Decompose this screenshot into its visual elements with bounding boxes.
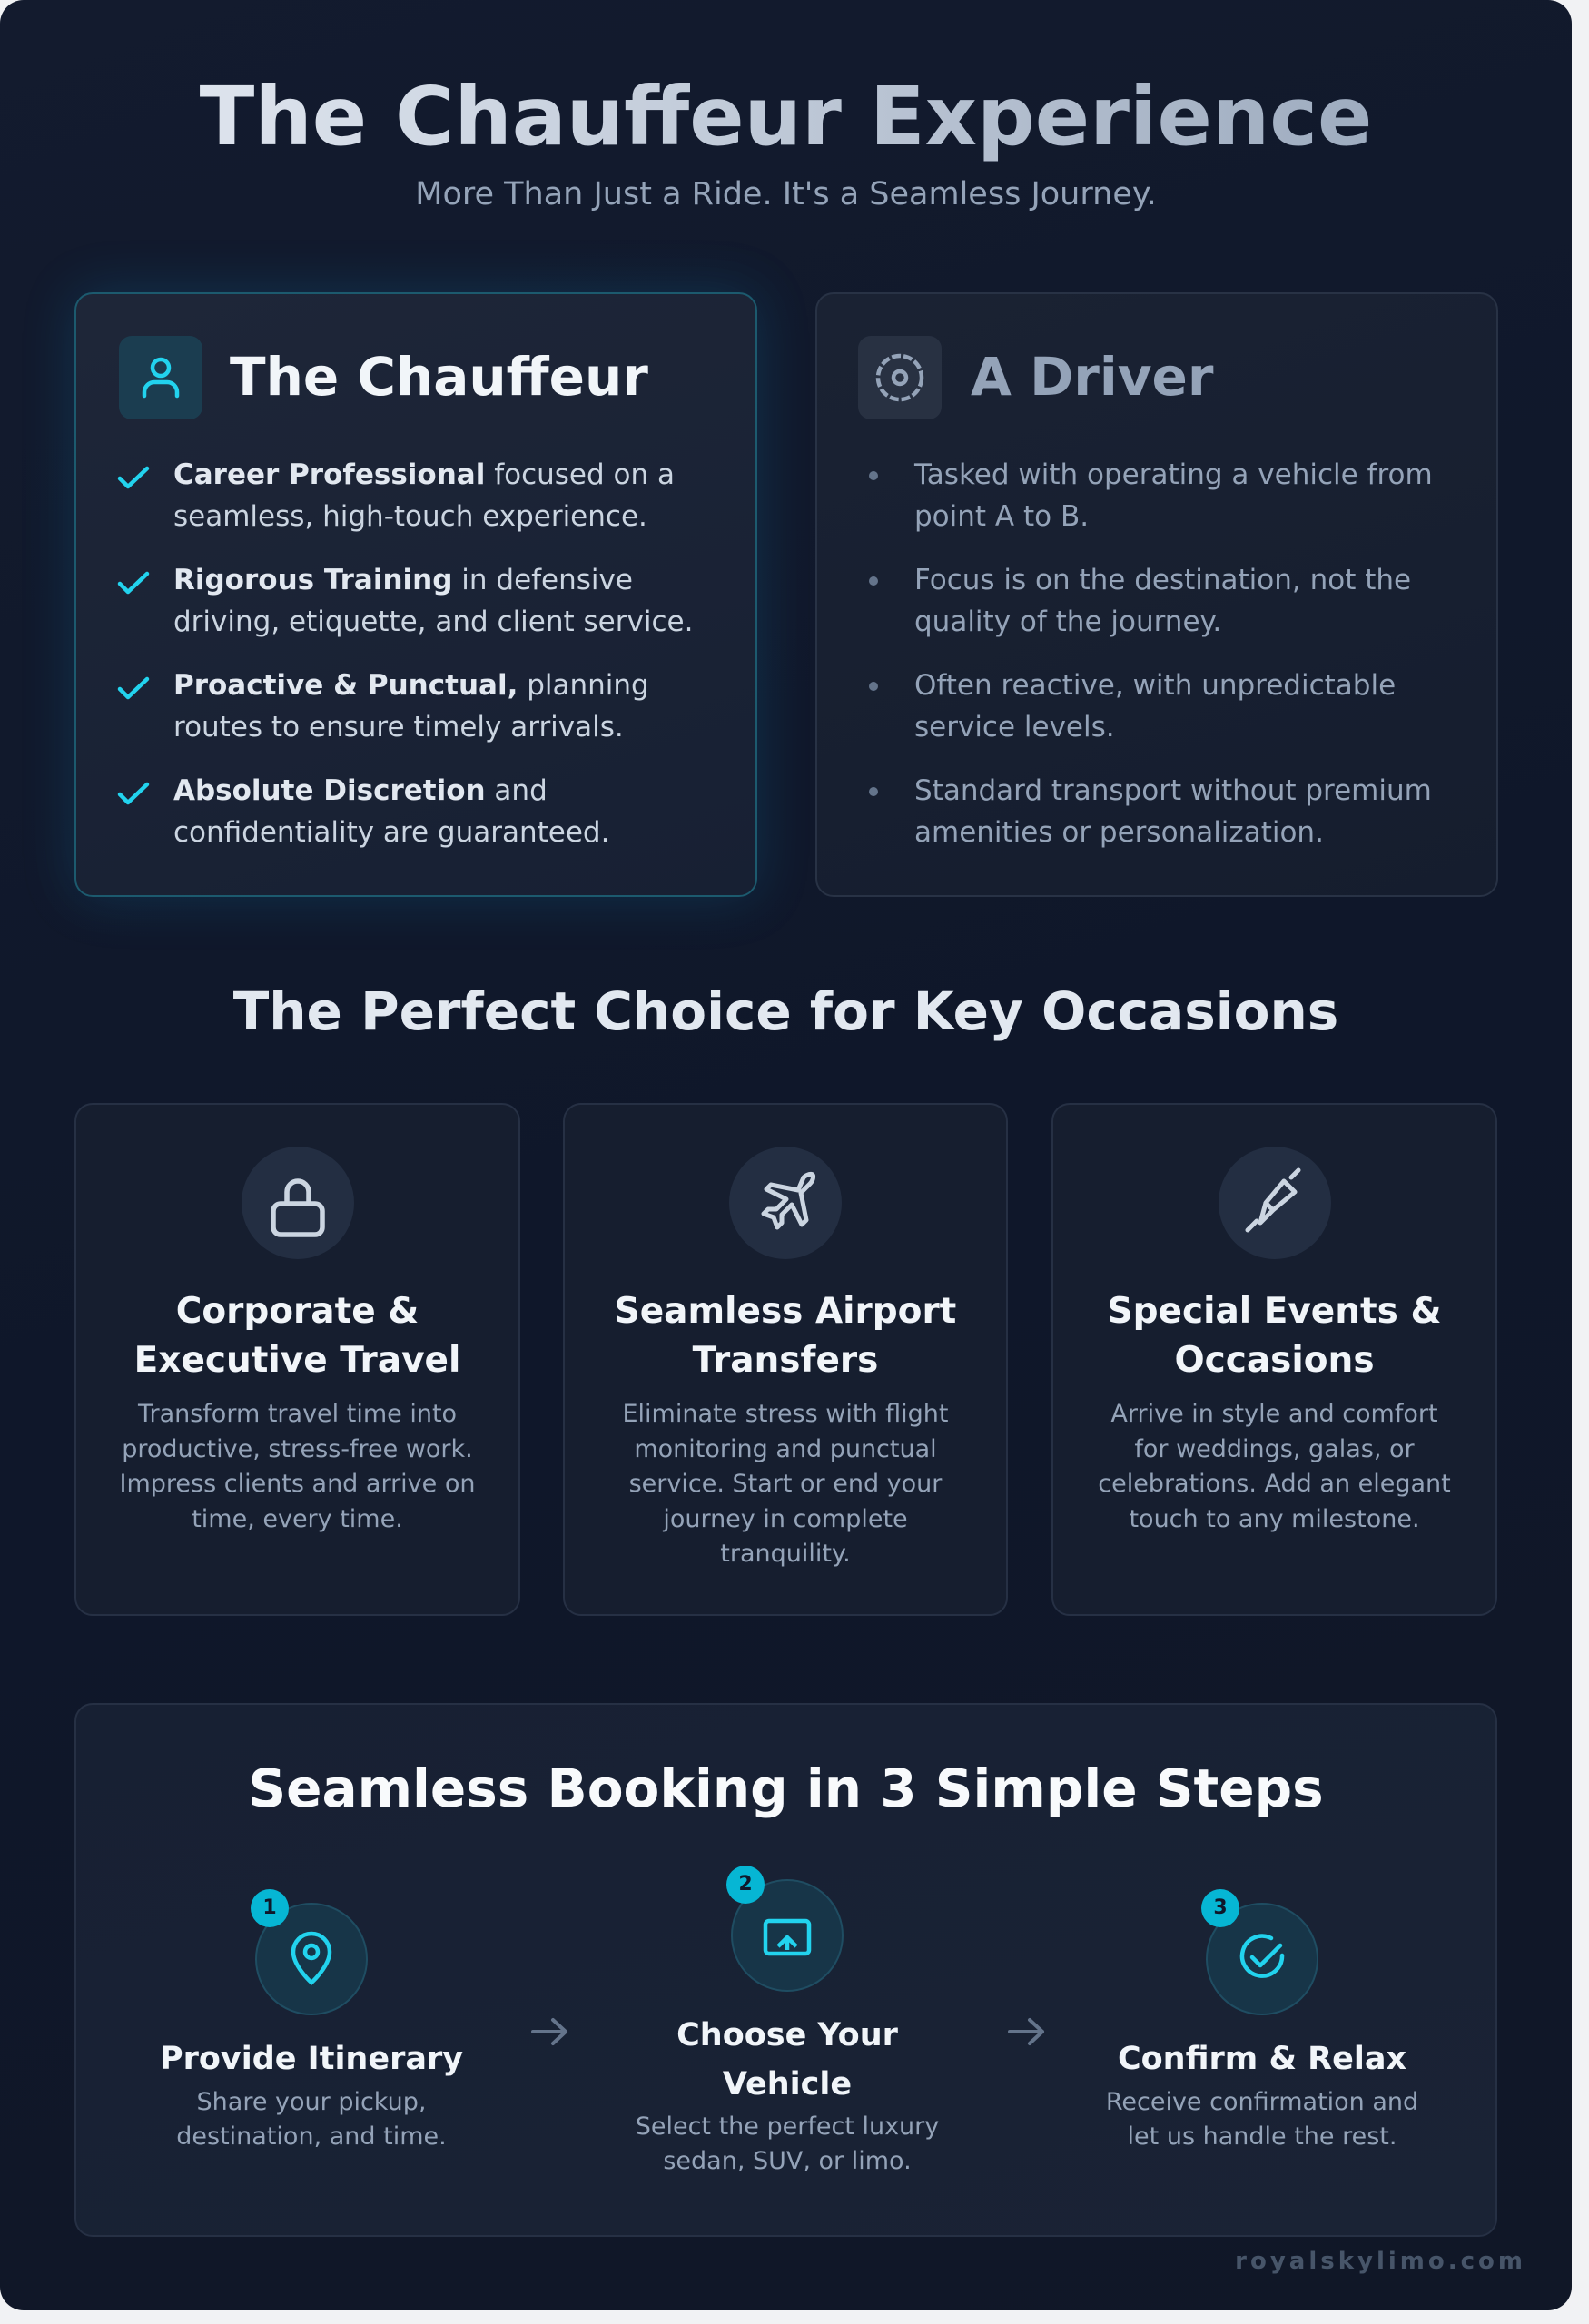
step title: Choose Your xyxy=(676,2017,898,2053)
badge 2 xyxy=(726,1866,765,1904)
heading: A Driver xyxy=(971,346,1213,408)
bullet list: amenities or personalization. xyxy=(914,816,1324,849)
bullet list xyxy=(869,458,1433,849)
card desc: touch to any milestone. xyxy=(1129,1505,1420,1532)
card desc: service. Start or end your xyxy=(629,1470,942,1498)
bullet list: Focus is on the destination, not the xyxy=(914,564,1411,596)
badge 1 xyxy=(251,1889,289,1927)
card title: Executive Travel xyxy=(134,1340,460,1381)
checklist: Career Professional focused on a xyxy=(173,458,675,491)
panel: events xyxy=(1051,1103,1497,1616)
checklist: driving, etiquette, and client service. xyxy=(173,606,693,638)
arrow 1 xyxy=(531,2017,568,2046)
card title: Transfers xyxy=(693,1340,878,1381)
checklist: seamless, high-touch experience. xyxy=(173,500,647,533)
card desc: time, every time. xyxy=(192,1505,403,1532)
checklist xyxy=(118,458,693,849)
checklist: routes to ensure timely arrivals. xyxy=(173,711,624,743)
step desc: let us handle the rest. xyxy=(1128,2122,1397,2151)
card desc: tranquility. xyxy=(720,1540,851,1568)
icon: check circle xyxy=(1206,1903,1318,2015)
step 1 xyxy=(160,1889,463,2151)
bullet list: quality of the journey. xyxy=(914,606,1221,638)
card title xyxy=(615,1291,956,1381)
step desc: Share your pickup, xyxy=(197,2088,426,2116)
step 2 xyxy=(636,1866,939,2175)
bullet list: Standard transport without premium xyxy=(914,774,1432,807)
card desc: productive, stress-free work. xyxy=(122,1434,473,1463)
checklist: Absolute Discretion and xyxy=(173,774,548,807)
bullet list: service levels. xyxy=(914,711,1115,743)
card desc: Transform travel time into xyxy=(138,1400,457,1428)
card title xyxy=(1108,1291,1441,1381)
badge 3: 3 xyxy=(1213,1896,1228,1919)
card title xyxy=(134,1291,460,1381)
arrow 2 xyxy=(1008,2017,1044,2046)
badge 2: 2 xyxy=(738,1873,753,1896)
step title xyxy=(676,2017,898,2102)
card title: Special Events & xyxy=(1108,1291,1441,1332)
icon: lock xyxy=(242,1147,354,1259)
icon: party xyxy=(1219,1147,1331,1259)
step desc xyxy=(1106,2088,1418,2151)
step title: Provide Itinerary xyxy=(160,2041,463,2077)
card title: Occasions xyxy=(1174,1340,1375,1381)
step title: Confirm & Relax xyxy=(1118,2041,1406,2077)
card desc: Eliminate stress with flight xyxy=(622,1400,948,1428)
icon: location pin xyxy=(255,1903,368,2015)
card desc xyxy=(1098,1400,1451,1532)
footer url: royalskylimo.com xyxy=(1235,2248,1526,2275)
card desc: Arrive in style and comfort xyxy=(1110,1400,1438,1428)
card desc xyxy=(622,1400,948,1568)
step title: Vehicle xyxy=(723,2066,852,2102)
panel: corporate xyxy=(74,1103,520,1616)
step desc: Receive confirmation and xyxy=(1106,2088,1418,2116)
checklist: Proactive & Punctual, planning xyxy=(173,669,649,702)
heading: The Chauffeur xyxy=(230,346,648,408)
panel: booking steps xyxy=(74,1703,1497,2237)
card desc: journey in complete xyxy=(663,1505,908,1532)
card desc xyxy=(119,1400,476,1532)
badge 3 xyxy=(1201,1889,1239,1927)
icon: vehicle xyxy=(731,1879,844,1992)
step 3 xyxy=(1106,1889,1418,2151)
step desc: sedan, SUV, or limo. xyxy=(663,2147,912,2175)
bullet list: Often reactive, with unpredictable xyxy=(914,669,1396,702)
checklist: Rigorous Training in defensive xyxy=(173,564,633,596)
icon: wheel xyxy=(858,336,942,419)
card desc: monitoring and punctual xyxy=(634,1434,937,1463)
card title: Seamless Airport xyxy=(615,1291,956,1332)
panel: the chauffeur xyxy=(74,292,757,897)
step desc: destination, and time. xyxy=(176,2122,447,2151)
step desc xyxy=(636,2112,939,2175)
icon: person xyxy=(119,336,202,419)
badge 1: 1 xyxy=(262,1896,277,1919)
bullet list: point A to B. xyxy=(914,500,1089,533)
checklist: confidentiality are guaranteed. xyxy=(173,816,609,849)
subtitle: More Than Just a Ride. It's a Seamless Journey. xyxy=(415,176,1157,212)
card title: Corporate & xyxy=(176,1291,419,1332)
section heading: occasions: The Perfect Choice for Key Occasions xyxy=(233,980,1338,1042)
bullet list: Tasked with operating a vehicle from xyxy=(914,458,1433,491)
card desc: celebrations. Add an elegant xyxy=(1098,1470,1451,1498)
step desc xyxy=(176,2088,447,2151)
title: The Chauffeur Experience xyxy=(200,69,1372,163)
icon: plane xyxy=(729,1147,842,1259)
card desc: for weddings, galas, or xyxy=(1134,1434,1415,1463)
panel: airport xyxy=(563,1103,1008,1616)
panel: a driver xyxy=(815,292,1498,897)
title xyxy=(0,65,1572,167)
heading: Seamless Booking in 3 Simple Steps xyxy=(248,1758,1324,1819)
card desc: Impress clients and arrive on xyxy=(119,1470,476,1498)
step desc: Select the perfect luxury xyxy=(636,2112,939,2141)
